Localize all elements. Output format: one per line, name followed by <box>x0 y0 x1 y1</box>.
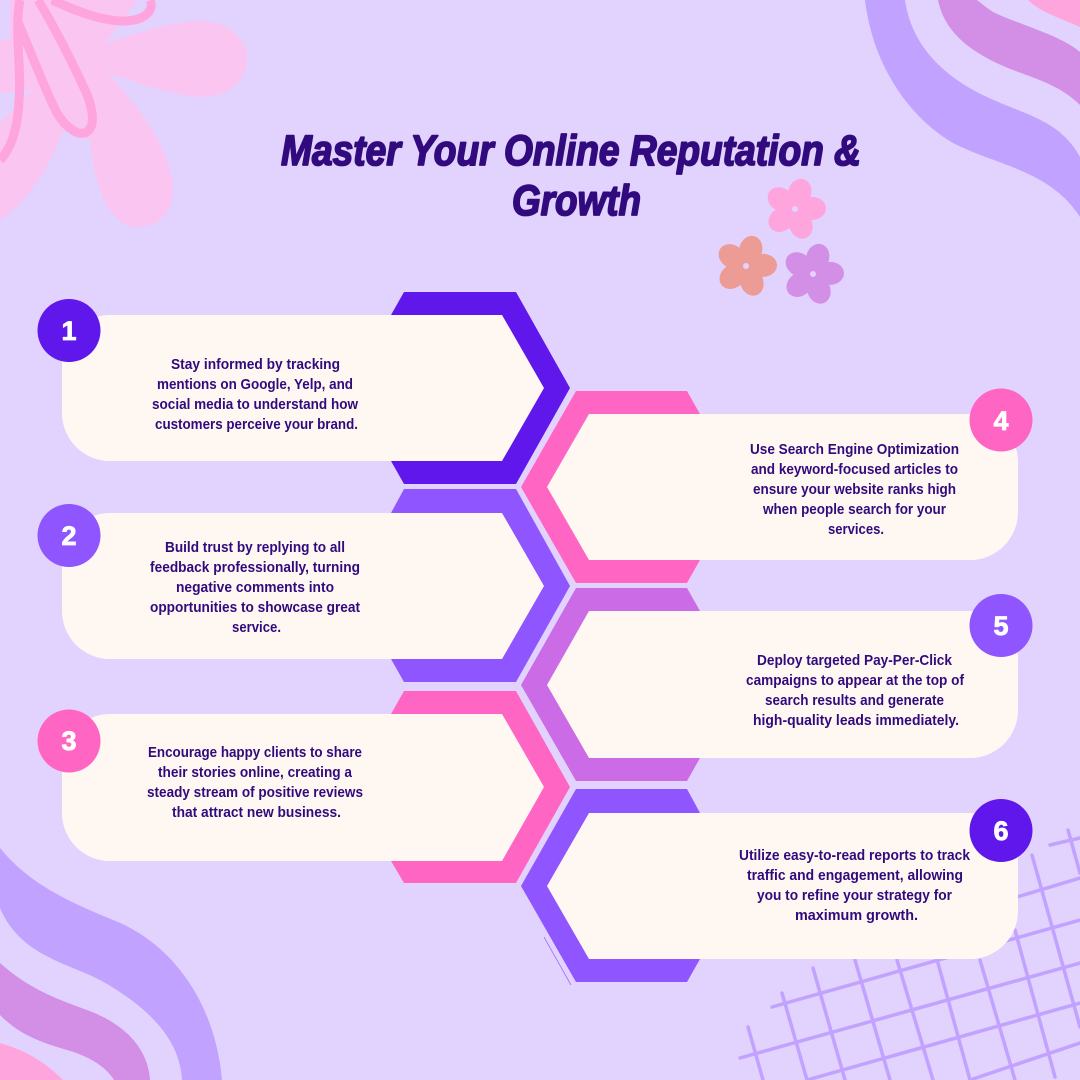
panel: step 1: Stay informed by tracking <box>171 356 340 373</box>
panel: step 4: and keyword-focused articles to <box>751 461 958 478</box>
panel: step 1 <box>38 292 570 484</box>
panel: step 2: service. <box>232 619 281 636</box>
icon: pink flower <box>754 170 835 249</box>
panel: step 5: 5 <box>993 611 1009 641</box>
panel: step 6: you to refine your strategy for <box>757 887 952 904</box>
panel: step 1: social media to understand how <box>152 396 358 413</box>
title <box>281 127 861 225</box>
panel: step 2: Build trust by replying to all <box>165 539 345 556</box>
panel: step 2 <box>38 489 570 682</box>
panel: step 4: 4 <box>993 406 1009 436</box>
panel: step 4: ensure your website ranks high <box>753 481 956 498</box>
panel: step 1: mentions on Google, Yelp, and <box>157 376 353 393</box>
panel: step 3: 3 <box>61 726 77 756</box>
decorative waves: bottom left <box>0 848 222 1080</box>
panel: step 3: that attract new business. <box>172 804 341 821</box>
panel: step 4: services. <box>828 521 884 538</box>
title: Master Your Online Reputation & <box>281 127 861 175</box>
panel: step 6: Utilize easy-to-read reports to track <box>739 847 971 864</box>
panel: step 6: 6 <box>993 816 1009 846</box>
panel: step 4: Use Search Engine Optimization <box>750 441 959 458</box>
panel: step 1: customers perceive your brand. <box>155 416 358 433</box>
panel: step 5: campaigns to appear at the top of <box>746 672 965 689</box>
panel: step 3: steady stream of positive reviews <box>147 784 363 801</box>
panel: step 3 <box>38 691 570 883</box>
panel: step 3: Encourage happy clients to share <box>148 744 362 761</box>
panel: step 1: 1 <box>61 316 77 346</box>
icon: purple flower <box>772 235 853 314</box>
panel: step 6 <box>521 789 1032 985</box>
panel: step 5: high-quality leads immediately. <box>753 712 959 729</box>
panel: step 5: Deploy targeted Pay-Per-Click <box>757 652 953 669</box>
panel: step 2: negative comments into <box>176 579 334 596</box>
panel: step 2: feedback professionally, turning <box>150 559 360 576</box>
decorative flowers cluster <box>705 170 853 314</box>
panel: step 5 <box>521 588 1032 781</box>
panel: step 6: traffic and engagement, allowing <box>747 867 963 884</box>
panel: step 6: maximum growth. <box>795 907 918 924</box>
decorative waves: top right <box>865 0 1080 217</box>
panel: step 5: search results and generate <box>765 692 944 709</box>
title: Growth <box>512 177 641 225</box>
panel: step 3: their stories online, creating a <box>158 764 353 781</box>
icon: salmon flower <box>705 227 786 306</box>
panel: step 4: when people search for your <box>762 501 946 518</box>
decorative grid: bottom right <box>740 830 1080 1080</box>
decorative flower: top left <box>0 0 247 227</box>
panel: step 2: opportunities to showcase great <box>150 599 360 616</box>
panel: step 4 <box>521 388 1032 583</box>
panel: step 2: 2 <box>61 521 77 551</box>
